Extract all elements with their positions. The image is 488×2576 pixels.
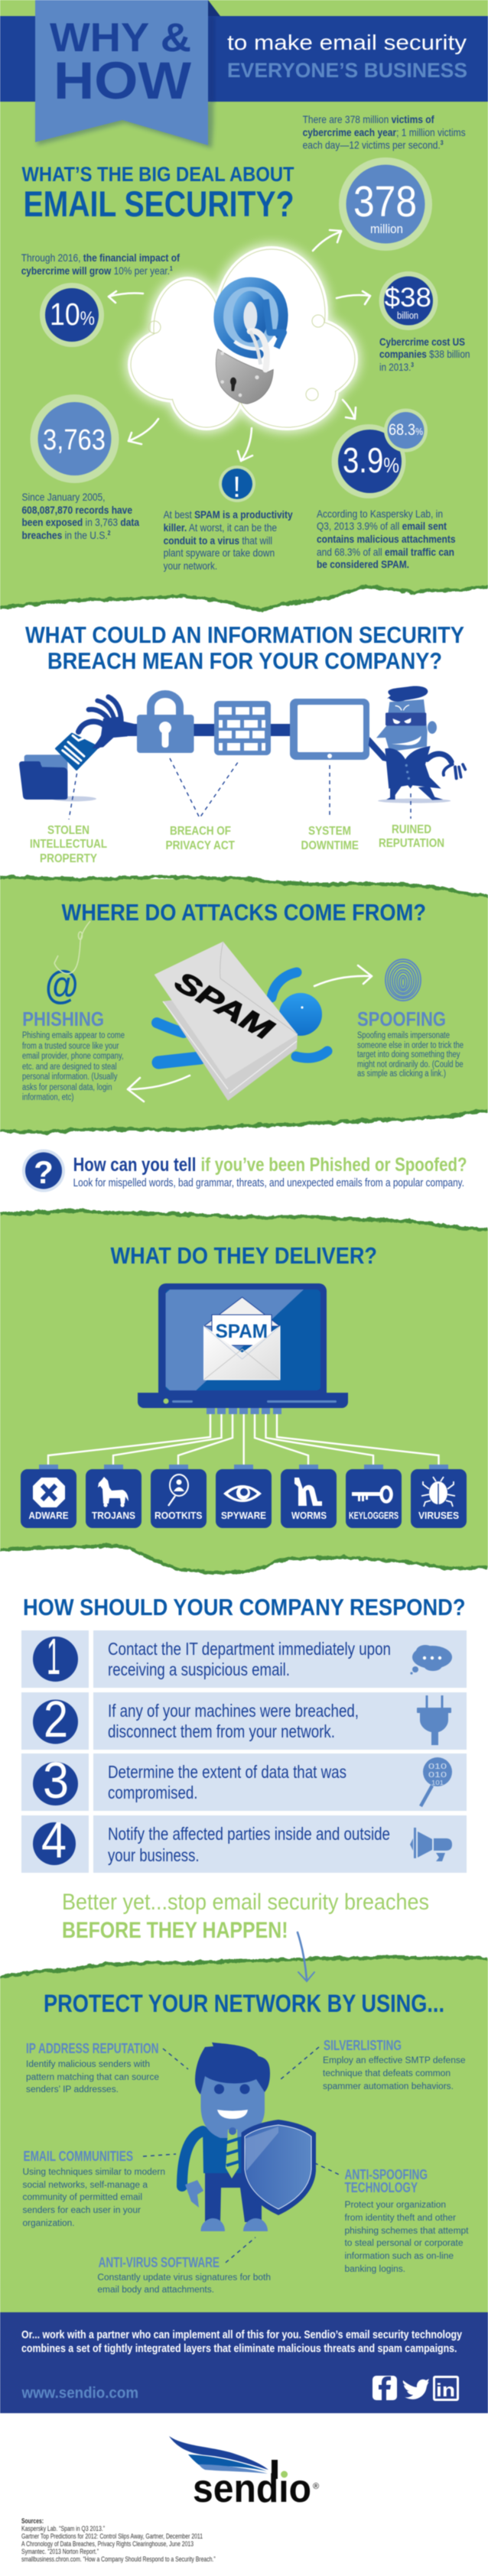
label: system downtime: DOWNTIME xyxy=(301,839,359,852)
box: viruses: VIRUSES xyxy=(418,1510,459,1521)
text: financial impact: 1 xyxy=(170,265,173,272)
box: worms xyxy=(281,1465,337,1528)
step 3: 3 xyxy=(43,1752,69,1809)
text: silverlisting: Employ an effective SMTP defense xyxy=(323,2056,465,2065)
text: email communities: community of permitted email xyxy=(23,2193,142,2202)
stat circle: 3,763 breaches: 3,763 xyxy=(43,424,106,456)
icon: plug xyxy=(417,1695,451,1745)
box: trojans: TROJANS xyxy=(92,1510,135,1521)
stat circle: 378 million: 378 xyxy=(353,177,417,226)
text: anti-spoofing technology: to steal personal or corporate xyxy=(344,2239,464,2248)
text: phishing: from a trusted source like your xyxy=(22,1042,119,1051)
icon: twitter xyxy=(403,2379,429,2399)
text: spoofing xyxy=(357,1007,464,1079)
illustration: man with shield xyxy=(182,2042,316,2231)
box: keyloggers: KEYLOGGERS xyxy=(349,1510,399,1521)
icon: magnifier with binary: 010 xyxy=(428,1763,447,1771)
step 2: If any of your machines were breached, xyxy=(108,1701,359,1721)
panel: where do attacks come from xyxy=(0,877,488,1132)
heading: breach xyxy=(25,621,464,674)
subtitle line: to make email security xyxy=(227,31,467,54)
icon: magnifier with binary xyxy=(421,1757,452,1806)
text: email communities: EMAIL COMMUNITIES xyxy=(23,2149,133,2164)
icon: question mark: ? xyxy=(34,1154,54,1190)
box: spyware: SPYWARE xyxy=(221,1510,266,1521)
step 2: disconnect them from your network. xyxy=(108,1721,335,1741)
icon: exclamation circle xyxy=(219,466,255,504)
heading: breach: BREACH MEAN FOR YOUR COMPANY? xyxy=(47,647,442,674)
box: worms: WORMS xyxy=(291,1510,327,1521)
text: cybercrime cost xyxy=(379,336,470,373)
shirt xyxy=(203,2128,252,2173)
icon: masked thief xyxy=(369,686,465,803)
stat circle: 10 percent: 10% xyxy=(50,297,95,332)
panel: how should your company respond xyxy=(21,1594,467,1943)
text: spam productivity: plant spyware or take down xyxy=(164,547,275,559)
icon: magnifier with binary: 010 xyxy=(428,1771,447,1780)
icon: phishing hook with at sign: @ xyxy=(45,963,78,1007)
text: anti-virus software: Constantly update virus signatures for both xyxy=(97,2273,271,2282)
title: why: WHY & xyxy=(50,15,191,60)
stat circle: 38 billion xyxy=(379,271,438,330)
text: phishing: PHISHING xyxy=(22,1007,104,1030)
text: spoofing: target into doing something they xyxy=(357,1050,460,1059)
sources: A Chronology of Data Breaches, Privacy Rights Clearinghouse, June 2013 xyxy=(21,2540,194,2548)
text: ip address reputation: senders’ IP addresses. xyxy=(26,2085,119,2094)
text: phishing xyxy=(22,1007,125,1102)
label: ruined reputation: REPUTATION xyxy=(379,837,444,850)
sources: Gartner Top Predictions for 2012: Control Slips Away, Gartner, December 2011 xyxy=(21,2532,203,2541)
text: email communities xyxy=(23,2149,165,2228)
step 3 xyxy=(21,1752,467,1811)
arrow: to phishing xyxy=(128,1075,190,1101)
icon: laptop with spam envelope: SPAM xyxy=(216,1321,268,1342)
panel: big deal about email security xyxy=(0,0,488,610)
label: stolen intellectual property xyxy=(30,824,107,865)
stat circle: 3.9 percent: 3.9% xyxy=(343,440,399,480)
text: cybercrime cost: Cybercrime cost US xyxy=(379,336,465,348)
text: spoofing: someone else in order to trick the xyxy=(357,1041,464,1050)
step 2 xyxy=(21,1691,467,1750)
text: ip address reputation: pattern matching that can source xyxy=(26,2073,159,2082)
text: records exposed: been exposed in 3,763 data xyxy=(21,516,139,528)
icon: spam envelope on figure xyxy=(155,942,327,1101)
text: phishing: Phishing emails appear to come xyxy=(22,1031,125,1040)
box: adware xyxy=(21,1465,76,1528)
text: ip address reputation: IP ADDRESS REPUTATION xyxy=(26,2041,159,2056)
icon: facebook xyxy=(373,2376,397,2400)
text: anti-spoofing technology: banking logins. xyxy=(344,2265,405,2274)
label: breach of privacy act xyxy=(165,825,235,852)
callout: better yet: BEFORE THEY HAPPEN! xyxy=(62,1918,288,1943)
text: phishing: etc. and are designed to steal xyxy=(22,1063,117,1072)
text: ip address reputation: Identify malicious senders with xyxy=(26,2060,150,2069)
connecting bar xyxy=(125,724,293,736)
icon: magnifier with binary: 101 xyxy=(431,1780,444,1786)
heading: big deal: EMAIL SECURITY? xyxy=(23,183,294,224)
arrow: to 3,763 xyxy=(129,419,158,444)
arm xyxy=(182,2131,203,2186)
label: system downtime xyxy=(301,825,359,852)
icon: firewall xyxy=(214,701,271,755)
cloud with padlock xyxy=(128,246,358,430)
pants xyxy=(205,2171,262,2222)
text: silverlisting xyxy=(323,2038,465,2091)
text: records exposed: breaches in the U.S. xyxy=(21,529,115,541)
stat circle: 378 million: million xyxy=(370,222,403,236)
panel: protect your network xyxy=(0,1932,488,2313)
text: phishing: asks for personal data, login xyxy=(22,1083,112,1092)
text: silverlisting: spammer automation behaviors. xyxy=(323,2082,454,2091)
text: spam productivity: At best SPAM is a productivity xyxy=(164,508,293,521)
text: records exposed: 2 xyxy=(108,530,111,537)
text: spam productivity xyxy=(164,508,293,572)
text: spam productivity: conduit to a virus that will xyxy=(164,534,272,547)
stat circle: 378 million xyxy=(339,157,432,251)
arrow: to 38 billion xyxy=(337,291,370,304)
icon: tablet xyxy=(290,699,369,760)
box: keyloggers xyxy=(346,1465,402,1528)
box: adware: ADWARE xyxy=(29,1510,69,1521)
icon: exclamation circle: ! xyxy=(233,472,241,504)
text: phishing: information, etc) xyxy=(22,1093,74,1102)
step 1 xyxy=(21,1628,467,1688)
text: anti-spoofing technology: Protect your organization xyxy=(344,2201,446,2210)
header band xyxy=(0,0,488,102)
stat circle: 38 billion: billion xyxy=(397,310,418,321)
stat circle: 3.9 percent xyxy=(332,424,405,498)
box: spyware xyxy=(216,1465,272,1528)
step 1: 1 xyxy=(47,1628,60,1685)
text: kaspersky: be considered SPAM. xyxy=(317,558,409,570)
icon: megaphone xyxy=(410,1828,452,1861)
text: spoofing: Spoofing emails impersonate xyxy=(357,1031,450,1040)
box: rootkits: ROOTKITS xyxy=(155,1510,203,1521)
text: kaspersky: contains malicious attachments xyxy=(317,533,456,545)
text: spam productivity: your network. xyxy=(164,560,217,572)
icon: phishing hook with at sign xyxy=(45,921,90,1007)
shield xyxy=(242,2120,316,2215)
step 4: your business. xyxy=(108,1845,199,1865)
title: how: HOW xyxy=(54,51,192,110)
text: anti-spoofing technology: ANTI-SPOOFING xyxy=(344,2167,428,2182)
panel: what do they deliver xyxy=(0,1211,488,1573)
question heading: How can you tell xyxy=(73,1154,196,1176)
cloud curl marks xyxy=(148,315,324,401)
hair xyxy=(195,2042,270,2094)
arrow: down to protect xyxy=(298,1932,314,1981)
text: kaspersky xyxy=(317,508,456,570)
text: anti-virus software: ANTI-VIRUS SOFTWARE xyxy=(99,2255,220,2270)
step 4: 4 xyxy=(41,1812,67,1869)
title ribbon xyxy=(35,0,213,148)
callout: better yet xyxy=(62,1890,429,1943)
text: 378 million victims: 3 xyxy=(441,139,444,147)
text: anti-spoofing technology: TECHNOLOGY xyxy=(344,2180,418,2195)
text: kaspersky: Q3, 2013 3.9% of all email sent xyxy=(317,520,447,532)
text: records exposed xyxy=(21,491,139,541)
sources: Kaspersky Lab. “Spam in Q3 2013.” xyxy=(21,2525,105,2533)
icon: linkedin xyxy=(433,2376,459,2401)
text: records exposed: 608,087,870 records have xyxy=(21,504,132,516)
label: stolen intellectual property: STOLEN xyxy=(47,824,89,837)
text: anti-spoofing technology xyxy=(344,2167,469,2274)
arrow: to exclamation xyxy=(238,428,252,461)
text: phishing: email provider, phone company, xyxy=(22,1052,124,1061)
box: rootkits xyxy=(151,1465,207,1528)
text: phishing: personal information. (Usually xyxy=(22,1072,118,1082)
stat circle: 68.3 percent: 68.3% xyxy=(389,421,423,439)
step 2: 2 xyxy=(44,1691,68,1748)
text: spoofing: SPOOFING xyxy=(357,1007,446,1030)
icon: padlock xyxy=(137,694,194,753)
label: breach of privacy act: BREACH OF xyxy=(170,825,231,838)
callout: better yet: Better yet...stop email security breaches xyxy=(62,1890,429,1915)
icon: linkedin: in xyxy=(436,2380,455,2401)
sources xyxy=(21,2517,216,2564)
icon: question mark xyxy=(22,1150,65,1192)
heading: deliver: WHAT DO THEY DELIVER? xyxy=(110,1242,377,1269)
text: financial impact: cybercrime will grow 10% per year. xyxy=(21,264,181,277)
text: spoofing: might not ordinarily do. (Could be xyxy=(357,1060,464,1069)
icon: spam envelope on figure: SPAM xyxy=(170,965,279,1046)
sources: smallbusiness.chron.com. “How a Company Should Respond to a Security Breach.” xyxy=(21,2555,216,2564)
sources: Sources: xyxy=(21,2517,44,2526)
heading: big deal xyxy=(21,163,294,224)
text: 378 million victims: There are 378 million victims of xyxy=(303,113,434,125)
subtitle emphasis: EVERYONE’S BUSINESS xyxy=(227,59,467,82)
text: 378 million victims: cybercrime each year; 1 million victims xyxy=(303,126,466,138)
text: cybercrime cost: in 2013. xyxy=(379,361,418,373)
face xyxy=(200,2075,265,2138)
box: viruses xyxy=(411,1465,467,1528)
step 1: receiving a suspicious email. xyxy=(108,1659,290,1679)
text: financial impact: Through 2016, the financial impact of xyxy=(21,251,180,264)
stat circle: 10 percent xyxy=(40,283,104,347)
logo: sendio: sendio xyxy=(193,2467,311,2511)
website: www.sendio.com xyxy=(21,2385,138,2402)
text: kaspersky: and 68.3% of all email traffic can xyxy=(317,546,454,558)
text: email communities: organization. xyxy=(23,2219,75,2228)
label: ruined reputation: RUINED xyxy=(392,823,431,836)
icon: fingerprint xyxy=(386,959,421,1001)
label: stolen intellectual property: INTELLECTUAL xyxy=(30,838,107,851)
sources: Symantec. “2013 Norton Report.” xyxy=(21,2548,99,2556)
step 4: Notify the affected parties inside and outside xyxy=(108,1824,390,1844)
step 3: Determine the extent of data that was xyxy=(108,1762,346,1782)
text: anti-spoofing technology: phishing schemes that attempt xyxy=(344,2227,469,2236)
network wires xyxy=(48,1414,439,1465)
tie xyxy=(226,2130,239,2179)
logo: sendio: ® xyxy=(313,2482,319,2491)
text: silverlisting: SILVERLISTING xyxy=(324,2038,402,2053)
step 1: Contact the IT department immediately upon xyxy=(108,1639,391,1659)
text: anti-virus software: email body and attachments. xyxy=(97,2286,214,2295)
text: kaspersky: According to Kaspersky Lab, in xyxy=(317,508,443,520)
label: breach of privacy act: PRIVACY ACT xyxy=(165,839,235,852)
arrow: to 3.9 percent xyxy=(343,400,356,419)
text: spoofing: as simple as clicking a link.) xyxy=(357,1069,446,1079)
question heading xyxy=(73,1154,467,1176)
text: anti-spoofing technology: information such as on-line xyxy=(344,2252,454,2261)
icon: hand stealing from folder xyxy=(19,697,136,801)
text: silverlisting: technique that defeats common xyxy=(323,2069,451,2078)
label: system downtime: SYSTEM xyxy=(308,825,351,838)
label: ruined reputation xyxy=(379,823,444,850)
text: anti-spoofing technology: from identity theft and other xyxy=(344,2214,456,2223)
text: cybercrime cost: 3 xyxy=(411,362,414,368)
label: stolen intellectual property: PROPERTY xyxy=(40,852,97,865)
panel: partner call to action footer xyxy=(0,2312,488,2413)
panel: how can you tell xyxy=(22,1150,467,1192)
logo: sendio xyxy=(169,2436,319,2511)
text: ip address reputation xyxy=(26,2041,159,2094)
text: email communities: Using techniques similar to modern xyxy=(23,2168,165,2177)
arrow: to 378 xyxy=(313,230,341,251)
icon: thought bubble xyxy=(410,1645,452,1675)
text: records exposed: Since January 2005, xyxy=(21,491,106,503)
heading: attacks: WHERE DO ATTACKS COME FROM? xyxy=(61,899,426,926)
cta text xyxy=(21,2328,463,2355)
text: 378 million victims: each day—12 victims per second. xyxy=(303,139,464,151)
text: financial impact xyxy=(21,251,180,277)
step 3: compromised. xyxy=(108,1783,197,1802)
stat circle: 68.3 percent xyxy=(384,408,428,453)
heading: big deal: WHAT’S THE BIG DEAL ABOUT xyxy=(21,163,294,186)
step 4 xyxy=(21,1812,467,1873)
arrow: to 10 percent xyxy=(109,291,143,303)
text: cybercrime cost: companies $38 billion xyxy=(379,348,470,360)
icon: email at sign chained to padlock xyxy=(216,282,284,404)
text: 378 million victims xyxy=(303,113,466,151)
text: anti-virus software xyxy=(97,2255,271,2295)
text: spam productivity: killer. At worst, it can be the xyxy=(164,521,277,534)
panel: what a breach could mean xyxy=(19,621,465,865)
text: email communities: senders for each user in your xyxy=(23,2206,141,2215)
text: email communities: social networks, self-manage a xyxy=(23,2181,148,2190)
box: trojans xyxy=(86,1465,142,1528)
arrow: to spoofing xyxy=(314,965,372,986)
icon: laptop with spam envelope xyxy=(138,1283,348,1414)
stat circle: 3,763 breaches xyxy=(31,394,119,483)
stat circle: 38 billion: $38 xyxy=(385,283,431,313)
